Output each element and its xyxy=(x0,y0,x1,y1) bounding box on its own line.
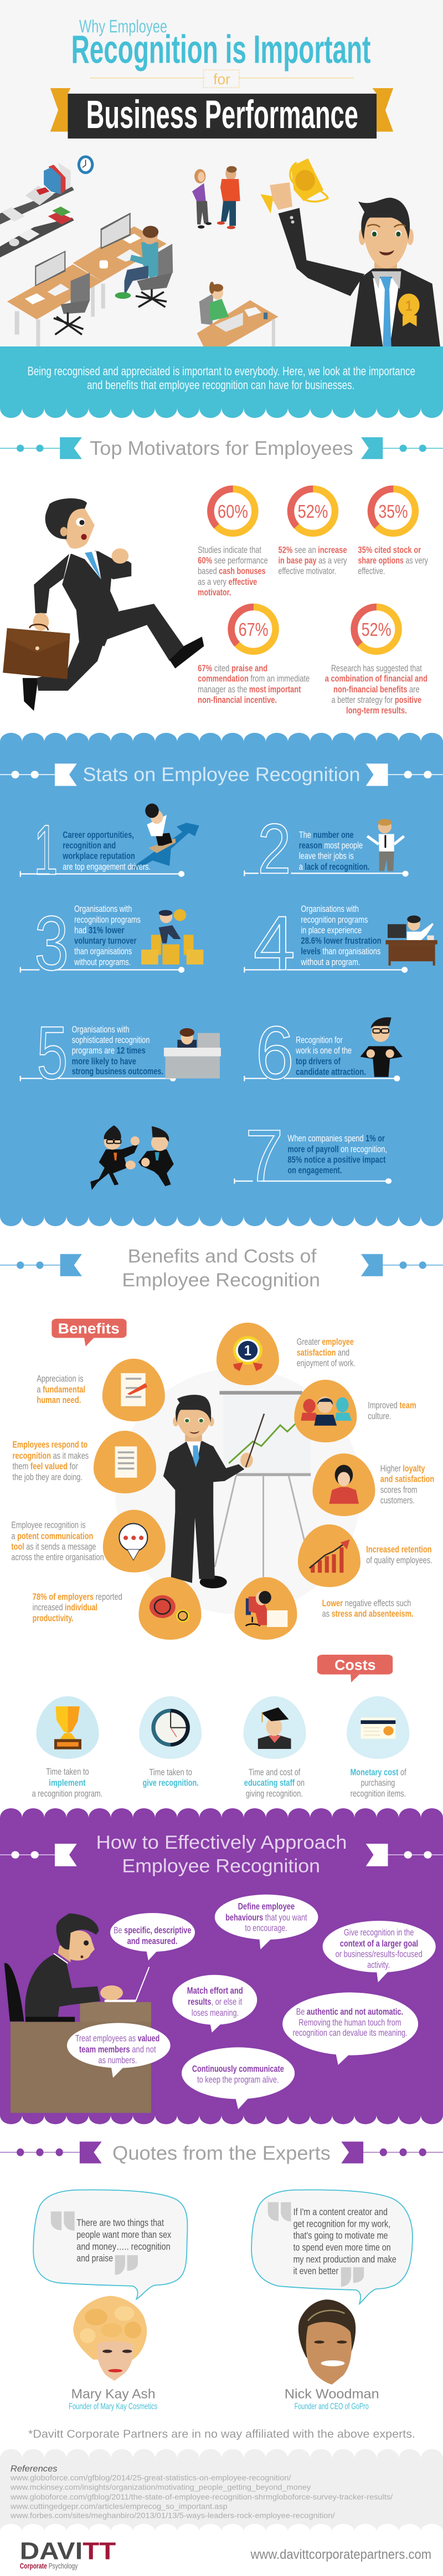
stat text: 67% praise: 67% cited praise and xyxy=(198,663,267,674)
footer section: Founder of Mary Kay Cosmetics xyxy=(69,2401,157,2411)
quote bubble: Nick Woodman: it even better xyxy=(293,2265,338,2277)
donut chart: 35% xyxy=(362,480,425,543)
speech bubble: communicate xyxy=(182,2047,295,2109)
stat text: 60%: motivator. xyxy=(198,587,231,598)
stat 3: lower turnover: Organisations with xyxy=(74,904,132,914)
illustration: man holding trophy: 1 xyxy=(405,298,412,314)
speech bubble: match effort: loses meaning. xyxy=(192,2008,239,2018)
speech bubble: larger goal: activity. xyxy=(367,1960,390,1970)
donut chart: 52%: 52% xyxy=(298,501,328,522)
text: retention xyxy=(366,1545,432,1565)
icon: wall clock xyxy=(78,155,94,174)
stat 3: lower turnover: voluntary turnover xyxy=(74,936,137,946)
references: www.mckinsey.com/insights/organization/motivating_people_getting_beyond_money xyxy=(10,2483,311,2492)
stat 6: candidate attraction xyxy=(244,1011,403,1095)
heading: how to effectively approach: Employee Recognition xyxy=(122,1855,320,1876)
text: fundamental need: human need. xyxy=(37,1395,81,1405)
icon: rising bar chart with arrow xyxy=(310,1539,350,1573)
stat 6: candidate attraction: top drivers of xyxy=(296,1056,341,1067)
speaker: Nick Woodman: Nick Woodman xyxy=(285,2386,379,2401)
text: fundamental need xyxy=(37,1374,85,1405)
references: References xyxy=(11,2463,58,2473)
references: www.cuttingedgepr.com/articles/emprecog_so_important.asp xyxy=(10,2502,228,2511)
illustration: two businessmen shaking hands xyxy=(90,1125,174,1190)
illustration: woman at laptop xyxy=(197,282,279,346)
title: for connector xyxy=(90,70,354,88)
quote bubble: Mary Kay Ash: people want more than sex xyxy=(76,2229,171,2240)
text: cost 4 xyxy=(351,1768,406,1799)
benefits section xyxy=(51,1319,311,1577)
speech bubble: be specific: Be specific, descriptive xyxy=(114,1926,192,1936)
egg: card cost xyxy=(347,1696,409,1759)
stat 2: lack of recognition: 2 xyxy=(257,809,291,889)
stat 4: lower frustration: in place experience xyxy=(301,925,362,936)
stat text: 52% base pay: effective motivator. xyxy=(279,566,336,577)
egg: graduate cost xyxy=(244,1696,306,1759)
title banner: business performance xyxy=(50,88,393,139)
text: cost 4: Monetary cost of xyxy=(351,1768,406,1777)
icon: speech bubble xyxy=(119,1524,147,1560)
stat 4: lower frustration xyxy=(244,900,437,986)
stat 6: candidate attraction: 6 xyxy=(256,1011,294,1095)
stat text: 35% stock options xyxy=(358,545,428,577)
stat text: 60%: based cash bonuses xyxy=(198,566,266,577)
donut chart: 60%: 60% xyxy=(218,501,248,522)
speaker: Mary Kay Ash xyxy=(69,2386,157,2411)
text: lower stress xyxy=(322,1598,413,1619)
stat 4: lower frustration: 28.6% lower frustration xyxy=(301,936,382,946)
icon: gears xyxy=(150,1595,189,1622)
speech bubble: team members xyxy=(67,2023,171,2078)
stat 1: career opportunities: recognition and xyxy=(63,840,116,851)
panel: intro band xyxy=(0,346,443,418)
references xyxy=(10,2463,393,2520)
donut chart: 35%: 35% xyxy=(379,501,408,522)
text: loyalty xyxy=(380,1464,434,1506)
text: team culture: Improved team xyxy=(368,1401,416,1411)
callout: costs xyxy=(317,1655,393,1682)
text: communication tool: a potent communication xyxy=(11,1532,93,1541)
intro text: and benefits that employee recognition can have for businesses. xyxy=(87,378,354,392)
stat 1: career opportunities: 1 xyxy=(34,810,58,890)
speech bubble: team members: as numbers. xyxy=(99,2055,137,2065)
quote bubble: Nick Woodman xyxy=(251,2190,413,2304)
heading: benefits and costs xyxy=(0,1245,443,1290)
illustration: shelves and books xyxy=(0,162,74,258)
stat 6: candidate attraction: work is one of the xyxy=(296,1045,352,1056)
speech bubble: define behaviours: to encourage. xyxy=(245,1924,287,1934)
portrait: Nick Woodman xyxy=(298,2299,356,2385)
stat 4: lower frustration: 4 xyxy=(254,900,295,986)
text: cost 1: a recognition program. xyxy=(32,1789,102,1799)
speech bubble: team members: team members and not xyxy=(79,2045,156,2054)
text: productivity: 78% of employers reported xyxy=(33,1592,122,1602)
text: satisfaction: enjoyment of work. xyxy=(297,1359,356,1369)
speech bubble: match effort: results, or else it xyxy=(188,1997,242,2007)
stat 6: candidate attraction: Recognition for xyxy=(296,1035,343,1045)
text: feel valued: the job they are doing. xyxy=(12,1472,83,1482)
heading: quotes from the experts: Quotes from the Experts xyxy=(112,2142,331,2164)
donut chart: 52% research xyxy=(345,598,408,661)
icon: trophy xyxy=(54,1706,81,1749)
portrait: Mary Kay Ash xyxy=(73,2296,147,2381)
stat 1: career opportunities: are top engagement drivers. xyxy=(63,861,151,872)
speech bubble: define behaviours: behaviours that you want xyxy=(225,1912,307,1922)
stat text: 52% base pay xyxy=(279,545,347,577)
stat text: 52% base pay: in base pay as a very xyxy=(279,555,347,566)
stat text: 60%: as a very effective xyxy=(198,577,257,587)
stat 5: strong business outcomes: Organisations with xyxy=(72,1024,130,1035)
icon: medal xyxy=(233,1336,262,1371)
text: team culture xyxy=(368,1401,416,1421)
illustration: man at desk with laptop xyxy=(4,1914,151,2113)
donut chart: 67% xyxy=(222,598,285,661)
illustration: running businessman with briefcase xyxy=(3,498,204,711)
stat 3: lower turnover: than organisations xyxy=(74,946,132,957)
footer section xyxy=(10,2386,431,2570)
egg: clock cost xyxy=(139,1696,202,1759)
speech bubble: be specific xyxy=(110,1913,195,1961)
speech bubble: team members: Treat employees as valued xyxy=(75,2034,159,2043)
panel: grey references background xyxy=(0,2449,443,2532)
quote bubble: Mary Kay Ash xyxy=(33,2190,187,2299)
speech bubble: match effort xyxy=(172,1975,257,2033)
donut chart: 52% xyxy=(281,480,344,543)
stat 4: lower frustration: without a program. xyxy=(301,957,360,967)
stat 6: candidate attraction: candidate attraction. xyxy=(296,1067,366,1077)
speaker: Nick Woodman xyxy=(285,2386,379,2411)
text: cost 1 xyxy=(32,1767,102,1799)
egg: document xyxy=(102,1359,165,1421)
text: communication tool: tool as it sends a message xyxy=(11,1542,96,1552)
stat text: 52% research xyxy=(325,663,427,716)
egg: speech bubble xyxy=(103,1510,166,1573)
text: satisfaction xyxy=(297,1337,356,1369)
egg: seated worker xyxy=(235,1577,297,1640)
quote bubble: Mary Kay Ash: and praise xyxy=(76,2252,113,2264)
heading: stats on employee recognition: Stats on Employee Recognition xyxy=(83,763,360,785)
quote bubble: Mary Kay Ash: and money….. recognition xyxy=(76,2241,171,2252)
donut chart: 52% research: 52% xyxy=(362,619,392,640)
egg: trophy cost xyxy=(37,1696,99,1759)
heading: benefits and costs: Benefits and Costs of xyxy=(128,1245,317,1267)
stat text: 67% praise: commendation from an immediate xyxy=(198,674,310,684)
stat 1: career opportunities xyxy=(20,803,199,890)
heading: benefits and costs: Employee Recognition xyxy=(122,1269,320,1290)
stat 5: strong business outcomes xyxy=(20,1011,221,1095)
text: feel valued: Employees respond to xyxy=(12,1440,87,1450)
stat 2: lack of recognition: The number one xyxy=(299,830,354,840)
stat 5: strong business outcomes: sophisticated recognition xyxy=(72,1035,150,1045)
speech bubble: be specific: and measured. xyxy=(127,1936,177,1946)
title: why employee: Why Employee xyxy=(79,17,167,37)
speech bubble: define behaviours xyxy=(215,1895,318,1950)
text: cost 1: Time taken to xyxy=(46,1767,89,1777)
speech bubble: communicate: Continuously communicate xyxy=(192,2064,284,2074)
stat 2: lack of recognition xyxy=(244,809,409,889)
stat 4: lower frustration: recognition programs xyxy=(301,915,368,925)
text: fundamental need: a fundamental xyxy=(37,1385,85,1395)
stat text: 60%: 60% see performance xyxy=(198,555,268,566)
text: fundamental need: Appreciation is xyxy=(37,1374,84,1384)
text: feel valued: recognition as it makes xyxy=(12,1451,89,1461)
text: cost 3 xyxy=(244,1768,305,1799)
quotes section xyxy=(0,2141,443,2385)
text: satisfaction: satisfaction and xyxy=(297,1348,349,1358)
text: cost 2 xyxy=(143,1768,199,1788)
stat 7: payroll on recognition: more of payroll on recognition, xyxy=(287,1145,387,1155)
stat 3: lower turnover: had 31% lower xyxy=(74,925,125,936)
stat 2: lack of recognition: reason most people xyxy=(299,840,363,851)
donut chart: 67%: 67% xyxy=(239,619,269,640)
icon: team of three xyxy=(301,1396,352,1426)
text: cost 3: giving recognition. xyxy=(246,1789,303,1799)
text: communication tool: across the entire organisation xyxy=(11,1553,104,1563)
egg: notepad xyxy=(94,1431,156,1493)
text: cost 4: purchasing xyxy=(361,1778,395,1788)
text: feel valued xyxy=(12,1440,89,1482)
stat 5: strong business outcomes: more likely to have xyxy=(72,1056,136,1067)
speech bubble: larger goal xyxy=(323,1921,436,1982)
text: loyalty: customers. xyxy=(380,1496,415,1506)
text: cost 3: educating staff on xyxy=(244,1778,305,1788)
stats section xyxy=(0,763,443,1095)
text: productivity: productivity. xyxy=(33,1613,74,1623)
illustration: man holding trophy xyxy=(260,159,440,346)
stat text: 67% praise: manager as the most important xyxy=(198,685,301,695)
heading: top motivators: Top Motivators for Employees xyxy=(90,437,353,459)
stat 3: lower turnover: 3 xyxy=(34,900,69,986)
stat text: 60% xyxy=(198,545,268,598)
icon: seated worker xyxy=(246,1591,287,1627)
stat 7: payroll on recognition: on engagement. xyxy=(287,1166,342,1176)
illustration: office desks with worker xyxy=(7,213,173,346)
heading: how to effectively approach xyxy=(0,1832,443,1876)
text: cost 2: give recognition. xyxy=(143,1778,199,1788)
speech bubble: communicate: to keep the program alive. xyxy=(197,2075,279,2085)
icon: customer woman xyxy=(329,1465,359,1504)
stat text: 60%: Studies indicate that xyxy=(198,545,261,555)
stat text: 35% stock options: effective. xyxy=(358,566,385,577)
callout: costs: Costs xyxy=(334,1657,376,1674)
title: for connector: for xyxy=(213,70,230,88)
text: cost 1: implement xyxy=(49,1778,86,1788)
text: cost 2: Time taken to xyxy=(149,1768,192,1777)
stat 1: career opportunities: Career opportunities, xyxy=(63,830,134,840)
panel: blue stats background xyxy=(0,733,443,1226)
text: satisfaction: Greater employee xyxy=(297,1337,354,1347)
logo: Davitt Corporate Psychology: DAVITT xyxy=(20,2538,116,2565)
stat 3: lower turnover: without programs. xyxy=(74,957,131,967)
text: productivity xyxy=(33,1592,122,1623)
stat text: 52% research: a better strategy for positive xyxy=(331,695,421,705)
egg: team xyxy=(294,1380,357,1442)
icon: medal: 1 xyxy=(244,1342,251,1359)
stat 7: payroll on recognition: 7 xyxy=(245,1114,284,1197)
costs section xyxy=(32,1591,413,1799)
text: feel valued: them feel valued for xyxy=(12,1462,78,1471)
stat 3: lower turnover xyxy=(20,900,203,986)
text: cost 3: Time and cost of xyxy=(249,1768,300,1777)
text: communication tool xyxy=(11,1521,104,1563)
illustration: presentation board xyxy=(215,1391,311,1577)
stat 4: lower frustration: levels than organisations xyxy=(301,946,380,957)
speech bubble: match effort: Match effort and xyxy=(187,1986,243,1996)
illustration: two colleagues talking xyxy=(192,166,240,229)
speech bubble: authentic xyxy=(282,1992,418,2065)
callout: benefits: Benefits xyxy=(58,1320,120,1337)
icon: credit card xyxy=(361,1717,395,1739)
stat text: 67% praise xyxy=(198,663,310,705)
references: www.globoforce.com/gfblog/2014/25-great-statistics-on-employee-recognition/ xyxy=(10,2473,291,2482)
icon: clock xyxy=(151,1709,190,1747)
stat 2: lack of recognition: a lack of recognition. xyxy=(299,861,369,872)
speech bubble: define behaviours: Define employee xyxy=(238,1902,295,1912)
stat 7: payroll on recognition: When companies spend 1% or xyxy=(287,1134,385,1144)
text: team culture: culture. xyxy=(368,1411,392,1421)
donut chart: 60% xyxy=(202,480,264,543)
stat text: 67% praise: non-financial incentive. xyxy=(198,695,277,705)
header section xyxy=(0,17,440,392)
stat 1: career opportunities: workplace reputation xyxy=(63,851,135,861)
illustration: presenter businessman xyxy=(163,1395,264,1588)
stat 2: lack of recognition: leave their jobs is xyxy=(299,851,354,861)
top motivators section xyxy=(0,437,443,716)
stat 5: strong business outcomes: strong business outcomes. xyxy=(72,1066,163,1077)
icon: graduate xyxy=(258,1707,291,1749)
egg: customer xyxy=(312,1453,375,1516)
icon: notepad xyxy=(115,1446,137,1478)
how to approach section xyxy=(0,1832,443,2113)
egg: gears xyxy=(138,1577,202,1640)
stat 4: lower frustration: Organisations with xyxy=(301,904,359,914)
icon: document and pencil xyxy=(121,1373,147,1406)
quote bubble: Mary Kay Ash: There are two things that xyxy=(76,2217,164,2228)
speaker: Mary Kay Ash: Mary Kay Ash xyxy=(71,2386,156,2401)
stat 5: strong business outcomes: programs are 12 times xyxy=(72,1045,146,1056)
stat text: 52% base pay: 52% see an increase xyxy=(279,545,347,555)
panel: purple approach background xyxy=(0,1808,443,2124)
egg: medal xyxy=(217,1323,279,1385)
stat 7: payroll on recognition xyxy=(234,1114,392,1197)
stat 7 and benefits heading section xyxy=(0,1114,443,1290)
logo: Davitt Corporate Psychology: Corporate Psychology xyxy=(20,2562,78,2570)
panel: benefits circle backdrop xyxy=(115,1368,361,1614)
text: loyalty: Higher loyalty xyxy=(380,1464,425,1474)
callout: benefits xyxy=(51,1319,127,1346)
text: communication tool: Employee recognition is xyxy=(11,1521,86,1531)
intro text xyxy=(27,364,415,392)
stat 3: lower turnover: recognition programs xyxy=(74,915,141,925)
text: productivity: increased individual xyxy=(33,1603,97,1613)
egg: rising chart xyxy=(298,1524,360,1587)
stat 5: strong business outcomes: 5 xyxy=(37,1011,68,1095)
